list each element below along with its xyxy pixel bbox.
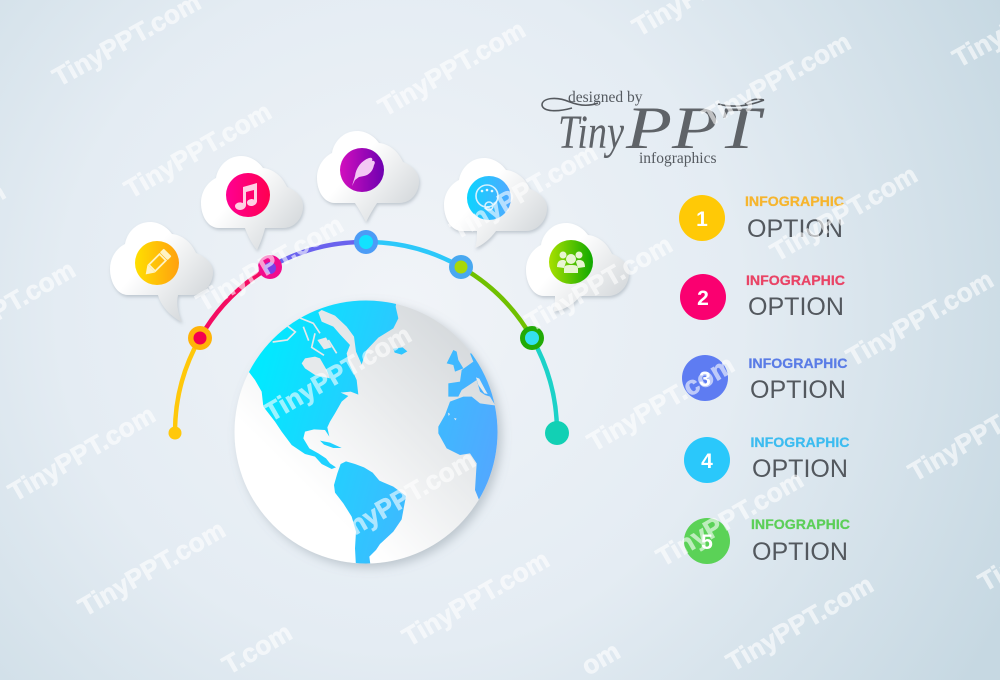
arc end dot <box>545 421 569 445</box>
watermarks: TinyPPT.com <box>373 14 531 122</box>
watermarks: TinyPPT.com <box>323 444 481 552</box>
badge 2: 2 <box>697 287 709 310</box>
watermarks: TinyPPT.com <box>520 229 678 337</box>
icon: music note <box>226 173 270 217</box>
Iceland and Caribbean <box>320 347 407 448</box>
arc start dot <box>168 426 182 440</box>
watermarks: om <box>576 635 625 680</box>
label 4: INFOGRAPHIC <box>750 434 850 450</box>
arc segment 3 purple-blue <box>270 242 366 267</box>
node 2 <box>258 255 282 279</box>
South America <box>334 461 406 567</box>
arc timeline <box>175 242 557 433</box>
watermarks: TinyPPT.com <box>651 464 809 572</box>
cloud callout 1: pencil <box>110 219 213 322</box>
Africa <box>438 396 498 500</box>
watermarks: TinyPPT.com <box>3 399 161 507</box>
logo: flourish <box>542 98 764 111</box>
option 3: OPTION <box>750 376 846 404</box>
arc segment 6 teal <box>532 338 557 433</box>
label 3: INFOGRAPHIC <box>748 355 848 371</box>
watermarks: TinyPPT.com <box>73 514 231 622</box>
legend option 2 <box>680 272 845 321</box>
watermarks: TinyPPT.com <box>397 544 555 652</box>
option 2: OPTION <box>748 293 844 321</box>
badge 1 <box>679 195 725 241</box>
badge 5: 5 <box>701 531 713 554</box>
watermarks: TinyPPT.com <box>259 319 417 427</box>
watermarks: TinyPPT.com <box>841 264 999 372</box>
badge 2 <box>680 274 726 320</box>
legend option 1 <box>679 193 844 243</box>
North America and Greenland <box>249 300 398 469</box>
label 5: INFOGRAPHIC <box>751 516 850 532</box>
badge 5 <box>684 518 730 564</box>
label 2: INFOGRAPHIC <box>746 272 845 288</box>
arc segment 5 green <box>461 267 532 338</box>
option 1: OPTION <box>747 215 843 243</box>
legend option 3 <box>682 355 848 404</box>
logo: infographics: infographics <box>639 150 716 167</box>
watermarks: TinyPPT.com <box>721 569 879 677</box>
node 3 <box>354 230 378 254</box>
cloud callout 4: chat dial <box>444 158 547 248</box>
badge 4 <box>684 437 730 483</box>
badge 4: 4 <box>701 450 713 473</box>
legend option 4 <box>684 434 850 483</box>
node 1 <box>188 326 212 350</box>
Europe <box>448 353 495 405</box>
watermarks: TinyPPT.com <box>191 209 349 317</box>
icon: pencil <box>113 219 201 307</box>
arc segment 1 yellow <box>175 338 200 433</box>
legend option 5 <box>684 516 850 566</box>
option 4: OPTION <box>752 455 848 483</box>
watermarks: TinyPPT.com <box>119 96 277 204</box>
label 1: INFOGRAPHIC <box>745 193 844 209</box>
node 4 <box>449 255 473 279</box>
badge 1: 1 <box>696 208 708 231</box>
globe <box>234 287 507 567</box>
arc segment 4 light blue <box>366 242 461 267</box>
arc segment 2 red-pink <box>200 267 270 338</box>
icon: chat dial <box>467 176 511 220</box>
option 5: OPTION <box>752 538 848 566</box>
cloud callout 2: music <box>201 156 303 250</box>
watermarks: TinyPPT.com <box>765 159 923 267</box>
icon: feather <box>340 148 384 192</box>
watermarks: TinyPPT.com <box>697 26 856 132</box>
icon: people <box>549 240 593 284</box>
badge 3 <box>682 355 728 401</box>
cloud callout 5: people <box>526 223 629 312</box>
logo: PPT: PPT <box>625 95 765 161</box>
logo: Tiny: Tiny <box>558 106 625 159</box>
watermarks: T.com <box>217 617 297 680</box>
watermarks: TinyPPT.com <box>445 137 603 245</box>
watermarks: TinyPPT.com <box>582 349 740 457</box>
node 5 <box>520 326 544 350</box>
badge 3: 3 <box>699 368 711 391</box>
logo <box>542 89 765 167</box>
cloud callout 3: feather <box>317 131 419 222</box>
logo: designed by: designed by <box>568 89 643 106</box>
